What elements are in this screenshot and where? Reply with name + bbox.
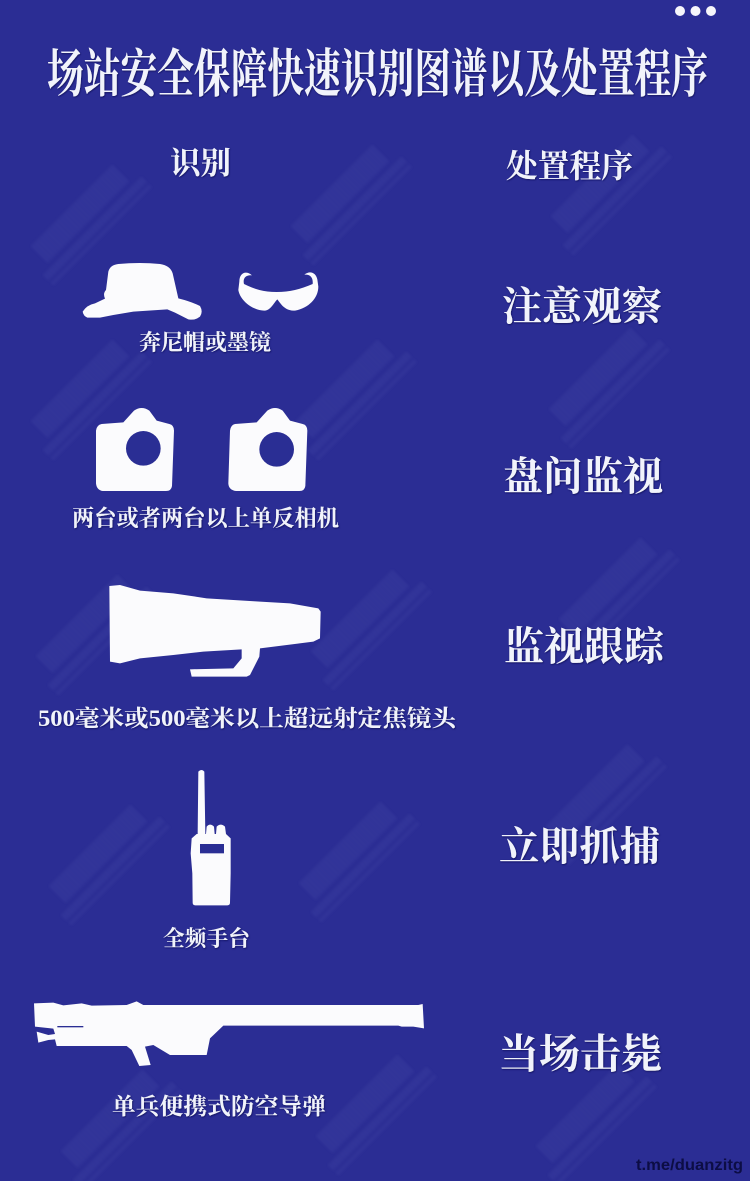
label: full-band radio: 全频手台 [163, 926, 251, 951]
label: 500mm lens: 500毫米或500毫米以上超远射定焦镜头 [38, 705, 458, 731]
icon: boonie hat [83, 263, 202, 320]
procedure: watch closely: 注意观察 [502, 284, 662, 329]
label: two or more SLR cameras: 两台或者两台以上单反相机 [72, 506, 339, 531]
icon: walkie-talkie [191, 770, 231, 905]
procedure: question and monitor: 盘问监视 [503, 454, 663, 499]
source watermark: t.me/duanzitg [636, 1157, 743, 1174]
label: MANPADS: 单兵便携式防空导弹 [112, 1093, 326, 1119]
heading: procedure: 处置程序 [506, 148, 633, 184]
menu dots [675, 6, 716, 16]
icon: camera left [96, 408, 174, 491]
icon: sunglasses [238, 272, 318, 311]
procedure: shoot on the spot: 当场击毙 [498, 1031, 662, 1077]
heading: identification: 识别 [170, 146, 231, 181]
label: hat or sunglasses: 奔尼帽或墨镜 [139, 330, 271, 355]
procedure: arrest immediately: 立即抓捕 [499, 824, 660, 869]
icon: telephoto lens [109, 585, 321, 677]
icon: camera right [228, 408, 307, 491]
icon: shoulder-launched missile [34, 1001, 424, 1066]
procedure: monitor and track: 监视跟踪 [504, 624, 667, 669]
